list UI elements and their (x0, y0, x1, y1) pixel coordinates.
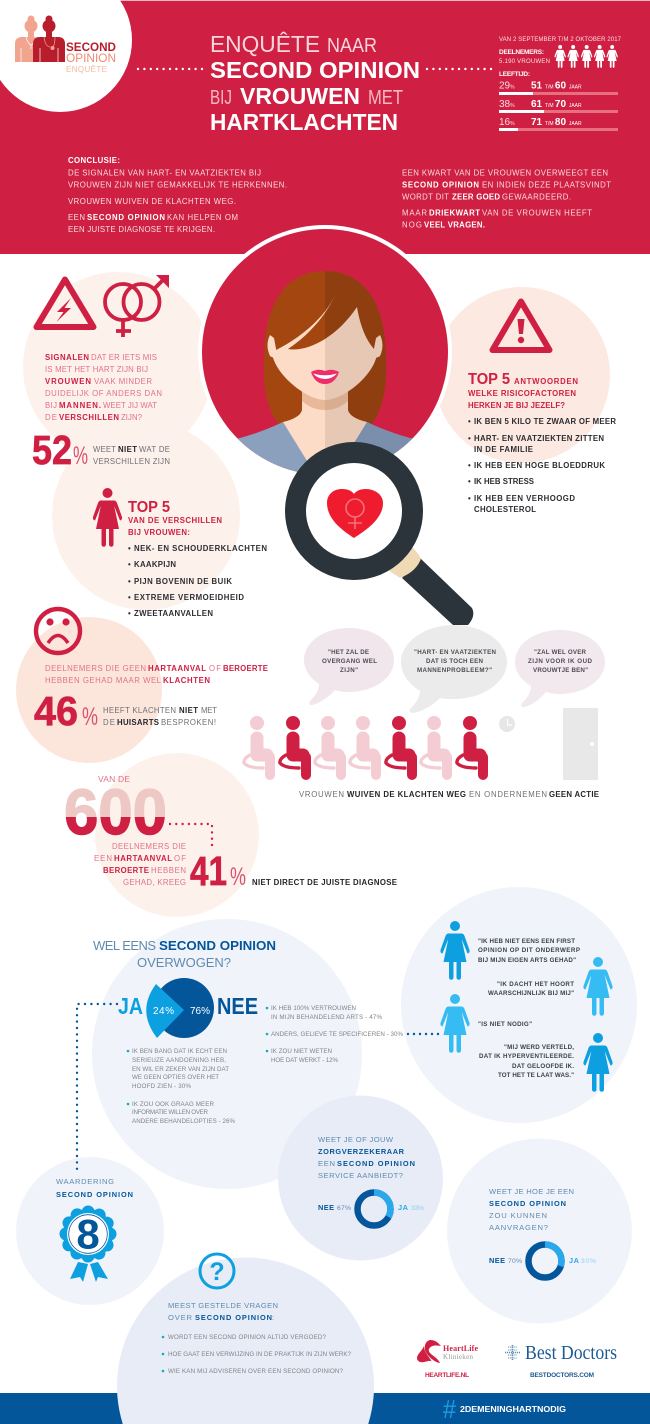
list: top 5 risicofactoren (468, 371, 616, 514)
list: ja redenen: IK BEN BANG DAT IK ECHT EEN (132, 1048, 227, 1055)
text: deelnemers zonder hartaanval: DEELNEMERS DIE GEEN (45, 664, 146, 673)
logo: heartlife klinieken (417, 1340, 478, 1379)
footer hashtag: 2DEMENINGHARTNODIG (460, 1405, 566, 1414)
conclusion left: CONCLUSIE: (68, 156, 120, 165)
list: ja redenen: IK ZOU OOK GRAAG MEER (132, 1101, 215, 1108)
conclusion right: WORDT DIT (402, 192, 449, 202)
text: signalen (45, 353, 162, 422)
panel: zorgverzekeraar: WEET JE OF JOUW (318, 1135, 394, 1144)
panel: zorgverzekeraar: JA (398, 1203, 409, 1212)
list: ja redenen: EN WIL ER ZEKER VAN ZIJN DAT (132, 1066, 229, 1073)
text: signalen: SIGNALEN (45, 353, 89, 362)
text: deelnemers hartaanval: EEN (94, 854, 112, 863)
conclusion left: SECOND OPINION (87, 213, 165, 222)
logo: heartlife klinieken: HeartLife (443, 1344, 478, 1353)
icon: sad face (36, 609, 80, 653)
icon: door (563, 708, 598, 780)
list: top 5 risicofactoren: IK BEN 5 KILO TE ZWAAR OF MEER (474, 417, 616, 426)
text: signalen: DAT ER IETS MIS (91, 353, 157, 362)
conclusion right: EN INDIEN DEZE PLAATSVINDT (482, 181, 611, 190)
quotes with women icons: "IS NIET NODIG" (478, 1021, 532, 1028)
quotes with women icons (440, 921, 613, 1092)
statistic: 46%: DE (103, 718, 115, 727)
speech bubble 3: VROUWTJE BEN" (533, 667, 588, 674)
survey facts: DEELNEMERS: (499, 49, 544, 56)
text: meest gestelde vragen: HOE GAAT EEN VERWIJZING IN DE PRAKTIJK IN ZIJN WERK? (168, 1351, 352, 1358)
list: nee redenen: IK HEB 100% VERTROUWEN (271, 1005, 356, 1012)
caption: vrouwen wuiven de klachten weg: GEEN ACTIE (549, 790, 599, 799)
statistic: 52%: WAT DE (139, 445, 170, 454)
heading: wel eens second opinion overwogen: WEL EENS (93, 938, 156, 953)
conclusion left: VROUWEN ZIJN NIET GEMAKKELIJK TE HERKENNEN. (68, 181, 287, 190)
title (210, 31, 420, 135)
panel: weet je hoe: JA (569, 1256, 580, 1265)
chart: ja nee pie: 76% (190, 1006, 210, 1017)
list: top 5 verschillen: • (128, 593, 131, 602)
quotes with women icons: BIJ MIJN EIGEN ARTS GEHAD" (478, 957, 576, 964)
statistic: 46%: 46 (34, 688, 78, 734)
caption: vrouwen wuiven de klachten weg: EN ONDERNEMEN (469, 790, 547, 799)
quotes with women icons: "IK DACHT HET HOORT (497, 981, 574, 988)
text: signalen: VROUWEN (45, 377, 91, 386)
conclusion left: DE SIGNALEN VAN HART- EN VAATZIEKTEN BIJ (68, 169, 261, 178)
list: top 5 risicofactoren: IN DE FAMILIE (474, 445, 533, 454)
heading: wel eens second opinion overwogen: OVERWOGEN? (137, 955, 231, 970)
survey facts: 38% (499, 99, 515, 110)
statistic: 46%: BESPROKEN! (161, 718, 216, 727)
quotes with women icons: DAT GELOOFDE IK. (512, 1063, 574, 1070)
list: top 5 verschillen: NEK- EN SCHOUDERKLACHTEN (134, 544, 267, 553)
text: signalen: BIJ (45, 401, 57, 410)
statistic: 41%: 41 (190, 848, 227, 894)
list: ja redenen: SERIEUZE AANDOENING HEB, (132, 1057, 226, 1064)
heading: wel eens second opinion overwogen (93, 938, 276, 970)
text: deelnemers hartaanval: OF (174, 854, 186, 863)
list: top 5 verschillen: VAN DE VERSCHILLEN (128, 516, 222, 525)
statistic: van de 600: 600 (64, 776, 167, 848)
text: meest gestelde vragen: WIE KAN MIJ ADVISEREN OVER EEN SECOND OPINION? (168, 1368, 344, 1375)
conclusion right (402, 169, 611, 230)
text: signalen: VERSCHILLEN (59, 413, 119, 422)
panel: zorgverzekeraar: 67% (337, 1205, 351, 1212)
panel: zorgverzekeraar (278, 1096, 443, 1260)
survey facts: 5.190 VROUWEN (499, 59, 550, 65)
title: ENQUÊTE (210, 31, 320, 57)
list: top 5 risicofactoren: • (468, 494, 471, 503)
speech bubble 1 (304, 628, 394, 705)
text: meest gestelde vragen: OVER (168, 1313, 193, 1322)
list: ja redenen: INFORMATIE WILLEN OVER (132, 1109, 209, 1116)
conclusion left: KAN HELPEN OM (167, 213, 238, 222)
list: nee redenen: IK ZOU NIET WETEN (271, 1048, 332, 1055)
header band (0, 0, 650, 254)
text: signalen: DE (45, 413, 57, 422)
background circles: blue panels (16, 887, 637, 1324)
logo: best doctors: BESTDOCTORS.COM (530, 1372, 594, 1379)
chart: ja nee pie: JA (118, 993, 143, 1019)
icon: question mark (200, 1254, 234, 1288)
list: nee redenen: HOE DAT WERKT - 12% (271, 1057, 338, 1064)
panel: weet je hoe (489, 1187, 596, 1278)
text: deelnemers zonder hartaanval: HEBBEN GEHAD MAAR WEL (45, 676, 162, 685)
speech bubble 1: "HET ZAL DE (328, 649, 369, 656)
statistic: 46%: NIET (179, 706, 198, 715)
illustration: woman portrait (198, 225, 452, 490)
chart: ja nee pie (118, 978, 258, 1038)
text: meest gestelde vragen: : (272, 1313, 274, 1322)
panel: waardering (56, 1177, 133, 1282)
text: signalen: VAAK MINDER (94, 377, 152, 386)
icons: five women (554, 45, 618, 68)
statistic: 46% (34, 688, 217, 734)
text: meest gestelde vragen: MEEST GESTELDE VRAGEN (168, 1301, 278, 1310)
logo: second opinion enquête: SECOND (66, 40, 116, 54)
statistic: 46%: % (82, 703, 98, 731)
list: top 5 risicofactoren: TOP 5 (468, 371, 510, 388)
text: signalen: ZIJN? (121, 413, 143, 422)
panel: weet je hoe: NEE (489, 1256, 505, 1265)
list: nee redenen: ANDERS, GELIEVE TE SPECIFICEREN - 30% (271, 1031, 403, 1038)
survey facts: LEEFTIJD: (499, 71, 530, 78)
text: meest gestelde vragen: WORDT EEN SECOND OPINION ALTIJD VERGOED? (168, 1334, 327, 1341)
conclusion left: VROUWEN WUIVEN DE KLACHTEN WEG. (68, 197, 236, 206)
statistic: 52%: NIET (118, 445, 137, 454)
panel: zorgverzekeraar: EEN (318, 1159, 335, 1168)
conclusion right: NOG (402, 221, 422, 230)
list: top 5 risicofactoren: WELKE RISICOFACTOREN (468, 389, 576, 398)
list: top 5 risicofactoren: HART- EN VAATZIEKTEN ZITTEN (474, 434, 604, 443)
icon: clock (499, 716, 515, 732)
conclusion left: EEN (68, 213, 85, 222)
title: NAAR (327, 35, 377, 57)
statistic: 52%: 52 (32, 427, 72, 473)
list: nee redenen (266, 1005, 403, 1064)
heading: wel eens second opinion overwogen: SECOND OPINION (159, 938, 276, 953)
panel: weet je hoe: SECOND OPINION (489, 1199, 566, 1208)
caption: vrouwen wuiven de klachten weg (299, 790, 599, 799)
statistic: 46%: HUISARTS (117, 718, 159, 727)
list: top 5 risicofactoren: • (468, 461, 471, 470)
list: top 5 risicofactoren: • (468, 434, 471, 443)
panel: weet je hoe: 30% (581, 1258, 596, 1265)
text: signalen: WEET JIJ WAT (103, 401, 157, 410)
list: top 5 verschillen: TOP 5 (128, 499, 170, 516)
panel: weet je hoe: 70% (508, 1258, 522, 1265)
list: top 5 verschillen: • (128, 609, 131, 618)
speech bubble 2: "HART- EN VAATZIEKTEN (414, 649, 497, 656)
icon: rating badge 8: 8 (76, 1210, 100, 1258)
quotes with women icons: DAT IK HYPERVENTILEERDE. (479, 1053, 574, 1060)
text: signalen: MANNEN. (59, 401, 101, 410)
conclusion right: MAAR (402, 209, 427, 218)
list: top 5 risicofactoren: CHOLESTEROL (474, 505, 536, 514)
list: top 5 verschillen: • (128, 560, 131, 569)
logo: second opinion enquête (0, 0, 132, 112)
icon: gender symbols (105, 275, 169, 337)
speech bubble 2: MANNENPROBLEEM?" (417, 667, 492, 674)
title: BIJ (210, 87, 232, 109)
panel: zorgverzekeraar: 33% (411, 1205, 424, 1212)
statistic: 41%: % (230, 863, 246, 891)
waiting room: seated women (244, 716, 483, 775)
icon: warning triangle (492, 302, 550, 350)
survey facts: 51 T/M 60 JAAR (531, 80, 582, 92)
text: deelnemers hartaanval: HEBBEN (151, 866, 186, 875)
logo: best doctors (505, 1342, 617, 1379)
text: deelnemers zonder hartaanval: BEROERTE (223, 664, 268, 673)
logo: best doctors: Best Doctors (525, 1342, 617, 1364)
statistic: 52% (32, 427, 170, 473)
list: top 5 risicofactoren: IK HEB EEN HOGE BLOEDDRUK (474, 461, 605, 470)
list: top 5 verschillen (128, 499, 267, 618)
conclusion right: VEEL VRAGEN. (424, 221, 485, 230)
conclusion right: GEWAARDEERD. (502, 192, 571, 202)
logo: second opinion enquête: OPINION (66, 51, 116, 65)
conclusion right: DRIEKWART (429, 209, 480, 218)
list: top 5 verschillen: EXTREME VERMOEIDHEID (134, 593, 244, 602)
list: ja redenen: HOOFD ZIEN - 30% (132, 1083, 191, 1090)
title: MET (368, 87, 403, 109)
statistic: 52%: VERSCHILLEN ZIJN (93, 457, 170, 466)
panel: zorgverzekeraar: SECOND OPINION (337, 1159, 415, 1168)
title: HARTKLACHTEN (210, 109, 398, 135)
text: deelnemers hartaanval: BEROERTE (103, 866, 149, 875)
panel: zorgverzekeraar: SERVICE AANBIEDT? (318, 1171, 403, 1180)
speech bubble 3: "ZAL WEL OVER (534, 649, 587, 656)
logo: second opinion enquête: ENQUÊTE (66, 65, 107, 74)
caption: vrouwen wuiven de klachten weg: WUIVEN DE KLACHTEN WEG (347, 790, 466, 799)
text: deelnemers zonder hartaanval: HARTAANVAL (148, 664, 206, 673)
text: signalen: DUIDELIJK OF ANDERS DAN (45, 389, 162, 398)
caption: vrouwen wuiven de klachten weg: VROUWEN (299, 790, 344, 799)
icon: question mark: ? (209, 1258, 225, 1286)
speech bubble 1: ZIJN" (340, 667, 358, 674)
list: top 5 verschillen: • (128, 577, 131, 586)
survey facts: 29% (499, 80, 515, 92)
icon: woman red (93, 488, 122, 547)
chart: donut 67/33 (358, 1192, 390, 1226)
list: top 5 verschillen: KAAKPIJN (134, 560, 176, 569)
panel: weet je hoe: WEET JE HOE JE EEN (489, 1187, 574, 1196)
speech bubble 3: ZIJN VOOR IK OUD (528, 658, 593, 665)
list: top 5 risicofactoren: IK HEB EEN VERHOOGD (474, 494, 575, 503)
list: top 5 risicofactoren: • (468, 477, 471, 486)
panel: zorgverzekeraar: NEE (318, 1203, 334, 1212)
conclusion left: EEN JUISTE DIAGNOSE TE KRIJGEN. (68, 225, 215, 234)
footer band (0, 1393, 650, 1424)
speech bubble 2: DAT IS TOCH EEN (426, 658, 484, 665)
background circles: peach panels (16, 272, 610, 917)
list: top 5 verschillen: PIJN BOVENIN DE BUIK (134, 577, 232, 586)
survey facts: 71 T/M 80 JAAR (531, 117, 582, 128)
speech bubble 2 (401, 625, 507, 713)
text: meest gestelde vragen: SECOND OPINION (195, 1313, 272, 1322)
icon: magnifying glass with heart (296, 452, 473, 625)
panel: weet je hoe: AANVRAGEN? (489, 1223, 548, 1232)
title: VROUWEN (240, 83, 360, 109)
statistic: van de 600: VAN DE (98, 774, 130, 784)
list: top 5 verschillen: BIJ VROUWEN: (128, 528, 190, 537)
quotes with women icons: "MIJ WERD VERTELD, (504, 1044, 574, 1051)
statistic: 46%: HEEFT KLACHTEN (103, 706, 176, 715)
list: ja redenen: WE GEEN OPTIES OVER HET (132, 1074, 219, 1081)
chart: donut 70/30 (528, 1244, 562, 1278)
panel: zorgverzekeraar: ZORGVERZEKERAAR (318, 1147, 405, 1156)
text: deelnemers zonder hartaanval: OF (209, 664, 221, 673)
speech bubble 1: OVERGANG WEL (322, 658, 377, 665)
quotes with women icons: TOT HET TE LAAT WAS." (498, 1072, 574, 1079)
statistic: 41%: NIET DIRECT DE JUISTE DIAGNOSE (252, 878, 397, 887)
list: top 5 verschillen: • (128, 544, 131, 553)
statistic: 41% (190, 848, 397, 894)
statistic: 52%: % (73, 442, 88, 470)
text: deelnemers zonder hartaanval (45, 664, 268, 685)
survey facts (499, 37, 622, 131)
list: top 5 verschillen: ZWEETAANVALLEN (134, 609, 213, 618)
panel: waardering: SECOND OPINION (56, 1190, 133, 1199)
statistic: 46%: MET (201, 706, 217, 715)
text: deelnemers hartaanval (94, 842, 186, 887)
footer hashtag (443, 1394, 566, 1424)
conclusion right: EEN KWART VAN DE VROUWEN OVERWEEGT EEN (402, 169, 608, 178)
chart: ja nee pie: NEE (217, 993, 258, 1019)
logo: heartlife klinieken: HEARTLIFE.NL (425, 1372, 469, 1379)
text: deelnemers hartaanval: GEHAD, KREEG (123, 878, 186, 887)
icon: high voltage warning (36, 280, 94, 327)
title: SECOND OPINION (210, 57, 420, 83)
survey facts: VAN 2 SEPTEMBER T/M 2 OKTOBER 2017 (499, 37, 622, 43)
list: ja redenen: ANDERE BEHANDELOPTIES - 26% (132, 1118, 235, 1125)
quotes with women icons: OPINION OP DIT ONDERWERP (478, 947, 580, 954)
quotes with women icons: WAARSCHIJNLIJK BIJ MIJ" (488, 990, 574, 997)
quotes with women icons: "IK HEB NIET EENS EEN FIRST (478, 938, 575, 945)
list: top 5 risicofactoren: IK HEB STRESS (474, 477, 534, 486)
list: ja redenen (127, 1048, 235, 1125)
speech bubble 3 (515, 630, 605, 707)
logo: heartlife klinieken: Klinieken (443, 1353, 474, 1361)
conclusion left (68, 156, 287, 234)
list: top 5 risicofactoren: • (468, 417, 471, 426)
chart: ja nee pie: 24% (153, 1006, 174, 1017)
text: deelnemers hartaanval: DEELNEMERS DIE (112, 842, 186, 851)
text: signalen: IS MET HET HART ZIJN BIJ (45, 365, 148, 374)
conclusion right: SECOND OPINION (402, 181, 479, 190)
list: top 5 risicofactoren: HERKEN JE BIJ JEZELF? (468, 401, 565, 410)
list: top 5 risicofactoren: ANTWOORDEN (514, 377, 578, 386)
statistic: 52%: WEET (93, 445, 116, 454)
list: nee redenen: IN MIJN BEHANDELEND ARTS - 47% (271, 1014, 382, 1021)
conclusion right: VAN DE VROUWEN HEEFT (482, 209, 592, 218)
survey facts: 61 T/M 70 JAAR (531, 99, 582, 110)
text: deelnemers zonder hartaanval: KLACHTEN (163, 676, 210, 685)
text: deelnemers hartaanval: HARTAANVAL (114, 854, 172, 863)
footer hashtag: # (443, 1394, 456, 1424)
text: meest gestelde vragen (162, 1301, 352, 1375)
conclusion right: ZEER GOED (452, 192, 500, 202)
panel: waardering: WAARDERING (56, 1177, 114, 1186)
survey facts: 16% (499, 117, 515, 128)
panel: meest gestelde vragen (117, 1257, 374, 1424)
panel: weet je hoe: ZOU KUNNEN (489, 1211, 547, 1220)
